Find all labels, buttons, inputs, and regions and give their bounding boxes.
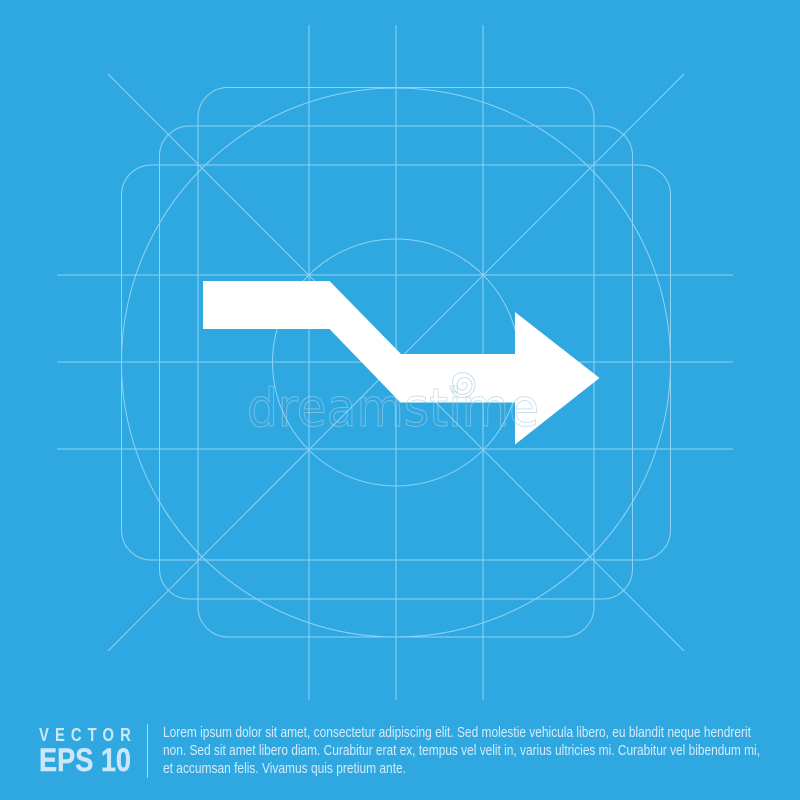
footer description text <box>163 725 760 777</box>
label: vector: VECTOR <box>39 724 137 745</box>
label: eps 10: EPS 10 <box>39 742 131 778</box>
watermark text: dreamstime <box>247 378 539 439</box>
icon: stepped arrow pointing right <box>203 281 600 444</box>
footer divider <box>146 724 148 778</box>
badge: vector eps 10 <box>39 724 137 778</box>
blueprint construction grid <box>57 25 733 700</box>
footer description text: et accumsan felis. Vivamus quis pretium ante. <box>163 761 406 777</box>
watermark spiral icon <box>450 372 475 398</box>
